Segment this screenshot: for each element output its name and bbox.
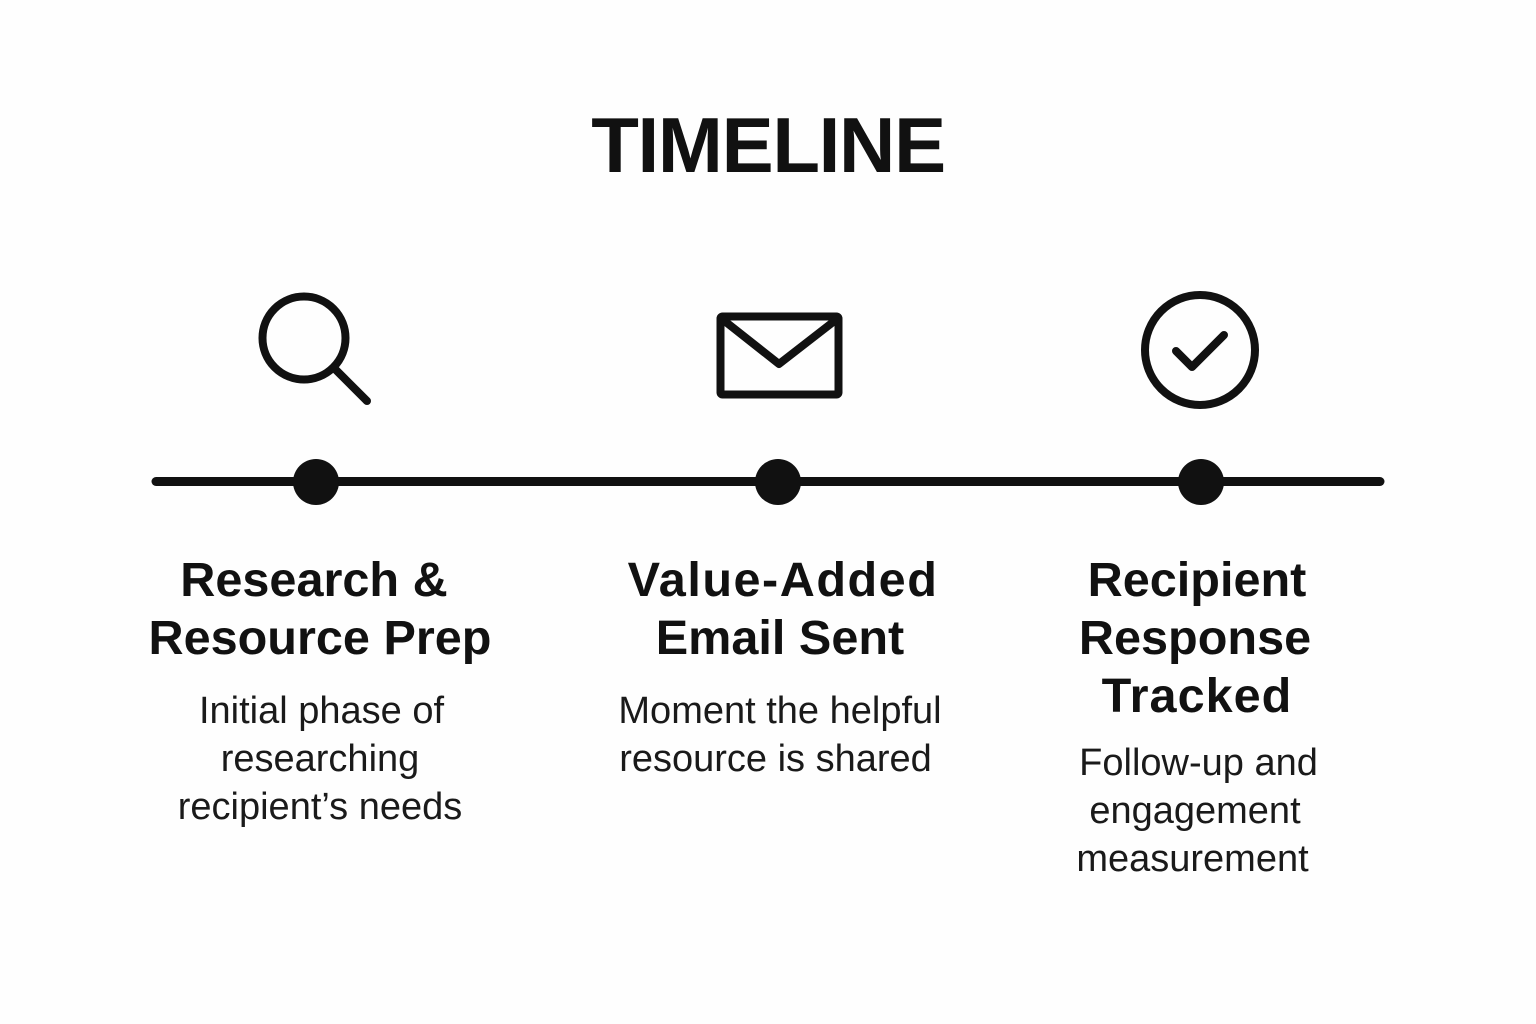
step 3 description: Follow-up and (1079, 742, 1318, 784)
step 1 heading: Research & (180, 553, 448, 607)
timeline line with markers (152, 459, 1384, 505)
title: TIMELINE (591, 101, 945, 189)
step 2 description: Moment the helpful (618, 690, 942, 732)
step 1 heading (148, 553, 492, 665)
step 1 description: researching (221, 738, 419, 780)
icon: magnifying glass (258, 292, 371, 405)
step 2: value-added email sent (618, 553, 942, 780)
icon: check circle (1141, 291, 1259, 409)
step 2 description (618, 690, 942, 780)
step 2 description: resource is shared (619, 738, 932, 780)
step 1 description: recipient’s needs (178, 786, 462, 828)
step 3 heading: Response (1079, 611, 1311, 665)
step 3: recipient response tracked (1076, 553, 1318, 880)
step 3 heading (1079, 553, 1311, 723)
step 3 description: engagement (1089, 790, 1301, 832)
step 3 description: measurement (1076, 838, 1309, 880)
icon: envelope (716, 312, 842, 398)
step 3 description (1076, 742, 1318, 880)
step 3 heading: Tracked (1102, 669, 1292, 723)
step 3 heading: Recipient (1088, 553, 1306, 607)
step 1 description: Initial phase of (199, 690, 444, 732)
step 2 heading (628, 553, 938, 665)
step 1: research and resource prep (148, 553, 492, 828)
step 1 description (178, 690, 462, 828)
step 1 heading: Resource Prep (148, 611, 492, 665)
step 2 heading: Value-Added (628, 553, 938, 607)
step 2 heading: Email Sent (656, 611, 904, 665)
